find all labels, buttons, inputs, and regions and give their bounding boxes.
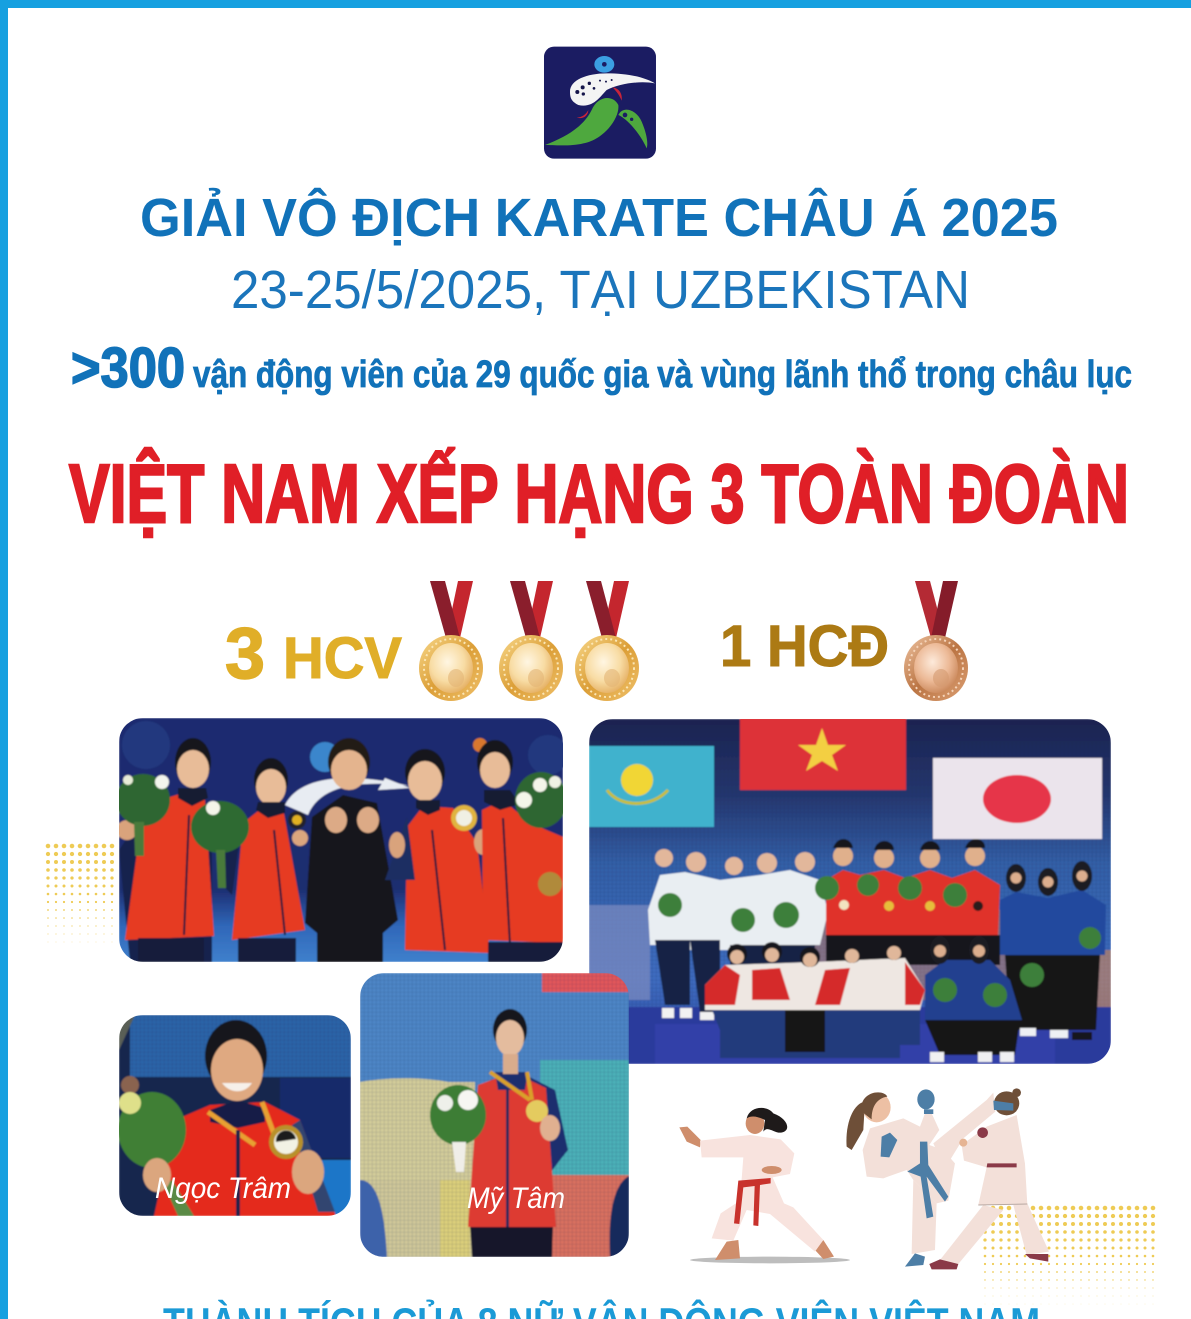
Kazakh team <box>648 849 828 1020</box>
icon: bronze medal <box>904 581 968 701</box>
athlete head <box>205 1020 267 1101</box>
Vietnamese team <box>826 839 1000 965</box>
bouquets on podium <box>658 874 1101 994</box>
participants number: >300 <box>71 336 185 400</box>
gold medal count: 3 <box>225 614 265 694</box>
gold medal count: HCV <box>283 626 402 691</box>
athlete <box>468 1009 568 1257</box>
photo: Ngọc Trâm <box>118 1015 351 1216</box>
illustration: karate kata pose <box>679 1108 850 1263</box>
participants line <box>71 336 1132 400</box>
flag: Vietnam <box>740 718 906 790</box>
athlete 2 <box>191 758 308 962</box>
bronze medal count: 1 HCĐ <box>720 614 889 679</box>
photo: Vietnamese team with coach <box>116 718 568 962</box>
flag: Japan <box>933 758 1102 839</box>
date and location: 23-25/5/2025, TẠI UZBEKISTAN <box>231 260 970 320</box>
name label: Mỹ Tâm: Mỹ Tâm <box>467 1182 565 1215</box>
fighter with maroon belt <box>929 1088 1049 1269</box>
logo: Asian Karate Championship emblem <box>544 47 656 159</box>
athlete 5 <box>477 740 567 962</box>
icon: gold medal 1 <box>419 581 483 701</box>
yellow dot pattern left <box>48 846 118 942</box>
athlete 1 <box>116 738 214 962</box>
gold medal count <box>225 614 402 694</box>
seated Iranian athletes <box>925 936 1022 1062</box>
bouquet <box>118 1092 194 1216</box>
podium <box>589 1007 1111 1064</box>
photo: podium with flags <box>589 718 1111 1064</box>
coach in black <box>305 738 398 962</box>
Iranian team <box>1000 861 1106 1040</box>
bouquet <box>430 1085 486 1172</box>
icon: gold medal 3 <box>575 581 639 701</box>
bouquet 5 <box>515 772 567 828</box>
seated Japanese team <box>705 940 925 1058</box>
gold medal <box>269 1125 303 1159</box>
athlete 4 <box>385 749 492 953</box>
name label: Ngọc Trâm: Ngọc Trâm <box>155 1172 291 1205</box>
bouquet 2 <box>191 801 249 888</box>
yellow dot pattern right <box>985 1208 1154 1304</box>
icon: gold medal 2 <box>499 581 563 701</box>
title: GIẢI VÔ ĐỊCH KARATE CHÂU Á 2025 <box>140 187 1058 248</box>
illustration: karate kicking pair <box>846 1088 1049 1269</box>
athlete body <box>154 1100 336 1216</box>
flag: Kazakhstan <box>589 746 714 827</box>
bouquet 1 <box>116 774 170 856</box>
fighter with blue belt <box>846 1089 995 1267</box>
photo: Mỹ Tâm <box>360 973 629 1257</box>
